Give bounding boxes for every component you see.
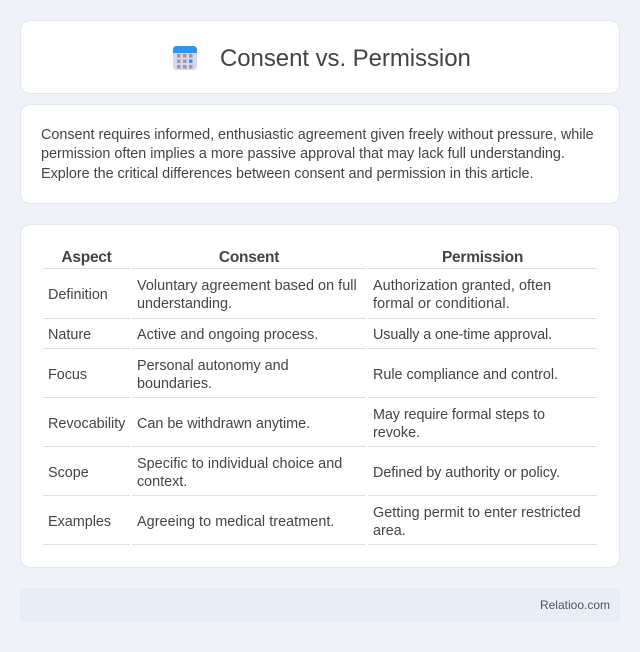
row: Definition: Voluntary agreement based on full: [137, 278, 357, 294]
header row: [61, 249, 523, 266]
intro paragraph: Consent requires informed, enthusiastic agreement given freely without pressure, while: [41, 127, 594, 143]
row: Focus: Focus: [48, 367, 87, 383]
intro paragraph: Explore the critical differences between consent and permission in this article.: [41, 166, 533, 182]
row: Revocability: revoke.: [373, 425, 420, 441]
row: Examples: Getting permit to enter restricted: [373, 505, 581, 521]
row: Focus: Personal autonomy and: [137, 358, 289, 374]
row: Revocability: Can be withdrawn anytime.: [137, 416, 310, 432]
row: Focus: Rule compliance and control.: [373, 367, 558, 383]
row: Scope: [48, 456, 560, 490]
header row: Consent: [219, 249, 279, 266]
row: Examples: Agreeing to medical treatment.: [137, 514, 334, 530]
intro paragraph: permission often implies a more passive approval that may lack full understanding.: [41, 146, 565, 162]
row: Revocability: Revocability: [48, 416, 125, 432]
row: Scope: Scope: [48, 465, 89, 481]
row: Examples: Examples: [48, 514, 111, 530]
row: Scope: context.: [137, 474, 187, 490]
icon: calendar: [173, 46, 197, 70]
row: Examples: [48, 505, 581, 539]
row: Examples: area.: [373, 523, 406, 539]
panel: intro text: [20, 104, 620, 204]
header row: Aspect: [61, 249, 112, 266]
row: Definition: Authorization granted, often: [373, 278, 551, 294]
row: Definition: formal or conditional.: [373, 296, 510, 312]
row: Revocability: May require formal steps to: [373, 407, 545, 423]
row: Scope: Defined by authority or policy.: [373, 465, 560, 481]
row: Nature: Nature: [48, 327, 91, 343]
row: Revocability: [48, 407, 545, 441]
title: Consent vs. Permission: [220, 45, 471, 72]
panel: title card: [20, 20, 620, 94]
row: Nature: Usually a one-time approval.: [373, 327, 552, 343]
footer credit: Relatioo.com: [540, 598, 610, 612]
row: Nature: [48, 327, 552, 343]
row: Nature: Active and ongoing process.: [137, 327, 318, 343]
header row: Permission: [442, 249, 523, 266]
row: Focus: boundaries.: [137, 376, 212, 392]
row: Focus: [48, 358, 558, 392]
intro paragraph: [41, 127, 594, 182]
panel: comparison table: [20, 224, 620, 568]
comparison table: [43, 249, 597, 545]
footer bar: [20, 588, 620, 622]
row: Scope: Specific to individual choice and: [137, 456, 342, 472]
row: Definition: Definition: [48, 287, 108, 303]
row: Definition: [48, 278, 551, 312]
row: Definition: understanding.: [137, 296, 232, 312]
